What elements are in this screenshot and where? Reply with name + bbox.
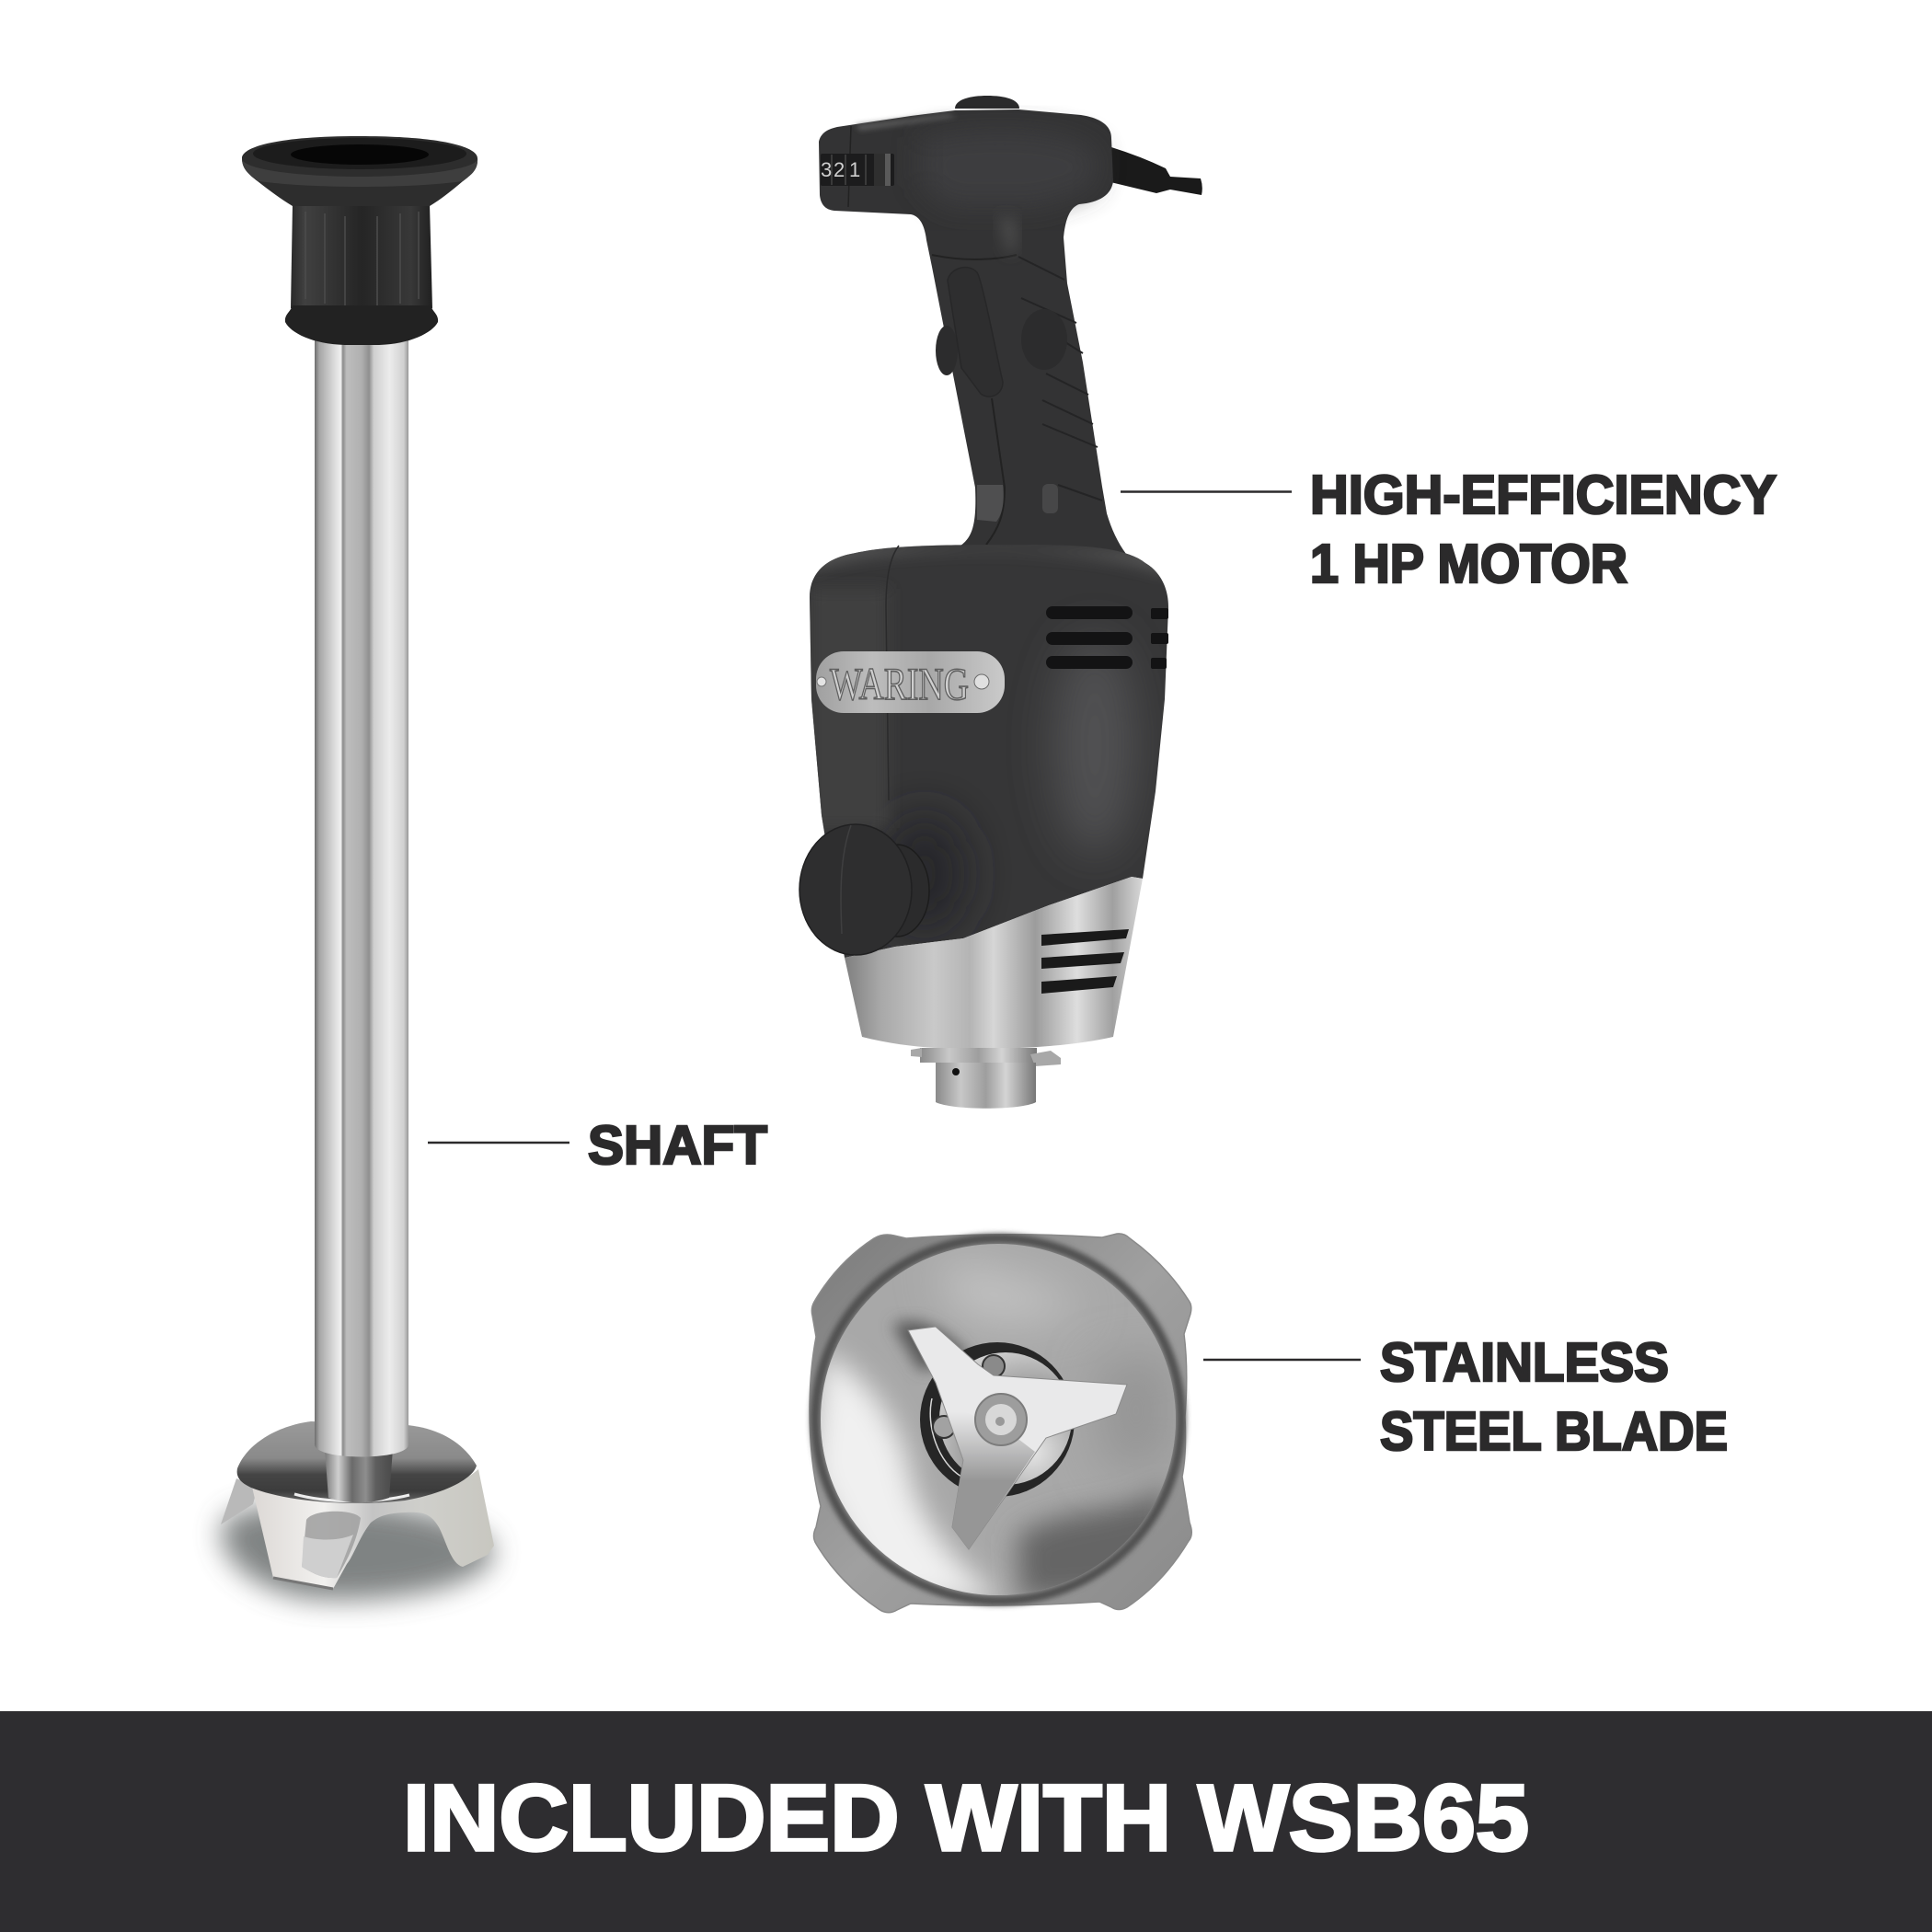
blade guard outer rim (810, 1234, 1191, 1613)
title band (0, 1711, 1932, 1932)
label line 1: HIGH-EFFICIENCY (1310, 465, 1777, 525)
motor collar (920, 1048, 1037, 1063)
motor steel vents (1041, 929, 1129, 994)
label line 2: STEEL BLADE (1380, 1401, 1728, 1462)
title: INCLUDED WITH WSB65 (403, 1765, 1529, 1870)
motor side button (1021, 309, 1067, 370)
motor steel base (845, 877, 1143, 1049)
leader line (428, 1142, 569, 1144)
shaft flange rim (242, 158, 477, 187)
callout: motor (1121, 465, 1777, 594)
motor power cord (1107, 147, 1202, 195)
shaft guard legs (251, 1469, 494, 1589)
guard dome ring highlight (294, 1494, 409, 1501)
motor handle and head (819, 109, 1126, 554)
motor neck highlight (998, 216, 1017, 254)
motor drive socket (936, 1063, 1036, 1109)
motor body vents (1046, 606, 1168, 669)
base shadow (222, 1502, 493, 1600)
shaft collar (285, 305, 438, 345)
motor neck light panel (977, 485, 1004, 522)
shaft product (221, 136, 494, 1600)
label line 2: 1 HP MOTOR (1310, 534, 1627, 594)
shaft flange top (253, 138, 466, 169)
motor trigger left bulge (936, 326, 958, 375)
leader line (1203, 1359, 1361, 1361)
motor badge (816, 651, 1005, 713)
blade lower prong texture (938, 1398, 1035, 1549)
brand name: WARING (830, 658, 969, 709)
blade nut tip (995, 1417, 1005, 1426)
speed dial (821, 154, 894, 186)
blade bowl reflections (810, 1256, 1173, 1601)
motor collar tabs (911, 1048, 1061, 1066)
blade hub opening (920, 1342, 1075, 1497)
shaft tube (315, 340, 408, 1457)
motor trigger panel (948, 268, 1003, 397)
shaft back leg (221, 1478, 258, 1524)
motor body (810, 545, 1168, 958)
blade product (810, 1234, 1191, 1613)
guard cylinder light (302, 1535, 353, 1578)
motor body seam (886, 546, 899, 800)
motor knob seam (841, 825, 851, 934)
badge rivets (817, 677, 826, 686)
motor locking knob (799, 824, 912, 955)
motor head shading (920, 129, 1099, 207)
shaft flange opening (291, 144, 429, 165)
label: SHAFT (588, 1115, 767, 1176)
motor head top highlight (856, 114, 957, 131)
guard leg bottom edge (273, 1578, 333, 1589)
motor grip band (932, 255, 1017, 259)
shaft flange body (242, 136, 477, 206)
blade nut (975, 1394, 1027, 1445)
speed dial numbers: 3 (821, 158, 832, 181)
blade star (908, 1327, 1127, 1549)
shaft neck rubber (291, 204, 432, 308)
motor grip seam (986, 398, 1005, 545)
guard inner cylinder (302, 1512, 361, 1578)
motor neck highlight strip (1042, 484, 1058, 513)
label line 1: STAINLESS (1380, 1332, 1669, 1393)
speed dial numbers: 1 (849, 158, 860, 181)
speed dial numbers: 2 (834, 158, 845, 181)
motor body shading (810, 543, 1168, 934)
shaft neck ribs (305, 212, 419, 305)
guard inner neck (325, 1449, 393, 1502)
leader line (1121, 490, 1292, 493)
blade guard dark channel (815, 1238, 1181, 1601)
motor knob stem (865, 845, 929, 937)
motor socket pin hole (952, 1068, 960, 1075)
motor grip ridges (1018, 257, 1102, 500)
blade hub disk (939, 1352, 1072, 1485)
blade hub arc (930, 1398, 961, 1477)
motor product (799, 96, 1202, 1109)
motor head seam (848, 126, 851, 207)
callout: blade (1203, 1332, 1728, 1462)
motor top button (955, 96, 1019, 109)
blade hub screws (983, 1355, 1005, 1377)
blade nut inner (985, 1404, 1017, 1435)
guard dome (237, 1421, 477, 1503)
blade guard bowl (821, 1244, 1176, 1595)
